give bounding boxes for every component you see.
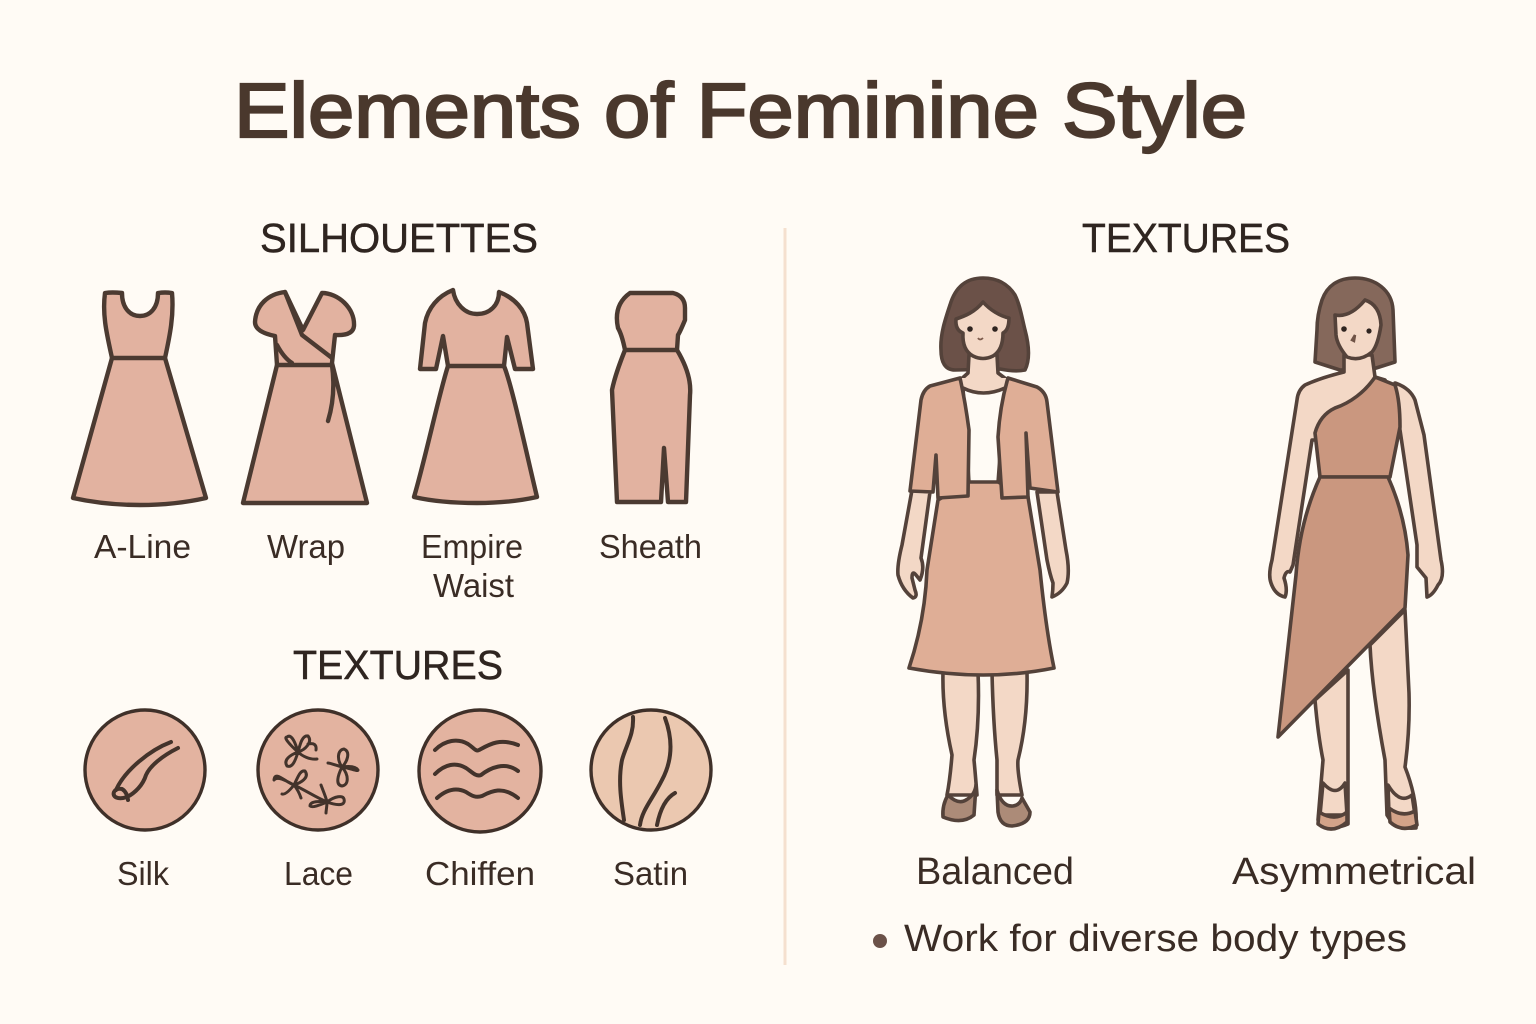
heading: silhouettes: SILHOUETTES [260, 215, 538, 261]
icon: satin swatch [591, 710, 711, 830]
label: silk: Silk [117, 855, 169, 892]
heading: textures: TEXTURES [293, 642, 503, 688]
dress [1278, 377, 1408, 737]
icon: silk swatch [85, 710, 205, 830]
jacket [910, 378, 1058, 498]
hair [941, 278, 1028, 371]
panel: textures swatches [85, 642, 711, 892]
white top [963, 388, 1005, 483]
icon: empire waist dress [414, 290, 537, 503]
heading: textures right: TEXTURES [1082, 215, 1290, 261]
label: empire waist: Empire [421, 528, 523, 565]
icon: wrap dress [243, 292, 367, 503]
panel: body types [873, 215, 1476, 960]
label: asymmetrical: Asymmetrical [1232, 851, 1476, 893]
panel: silhouettes [73, 215, 702, 604]
label: wrap: Wrap [267, 528, 345, 565]
skin: arms, neck and legs [1270, 355, 1442, 828]
label: balanced: Balanced [916, 851, 1074, 893]
face [956, 302, 1009, 358]
label: empire waist [421, 528, 523, 604]
title: Elements of Feminine Style [234, 68, 1247, 154]
icon: a-line dress [73, 292, 206, 505]
icon: chiffon swatch [419, 710, 541, 832]
label: satin: Satin [613, 855, 688, 892]
label: lace: Lace [284, 855, 353, 892]
icon: lace swatch [258, 710, 378, 830]
label: sheath: Sheath [599, 528, 702, 565]
figure: balanced [898, 278, 1068, 826]
icon: sheath dress [612, 293, 690, 502]
face [1335, 300, 1381, 359]
label: a-line: A-Line [94, 528, 191, 565]
bullet note: Work for diverse body types [904, 918, 1407, 960]
label: empire waist: Waist [433, 567, 514, 604]
shoes [1318, 783, 1417, 829]
shoes [943, 785, 1030, 826]
hair [1315, 278, 1395, 370]
label: chiffen: Chiffen [425, 855, 535, 892]
figure: asymmetrical [1270, 278, 1442, 829]
skirt [909, 482, 1054, 675]
skin: arms, neck and legs [898, 355, 1068, 795]
